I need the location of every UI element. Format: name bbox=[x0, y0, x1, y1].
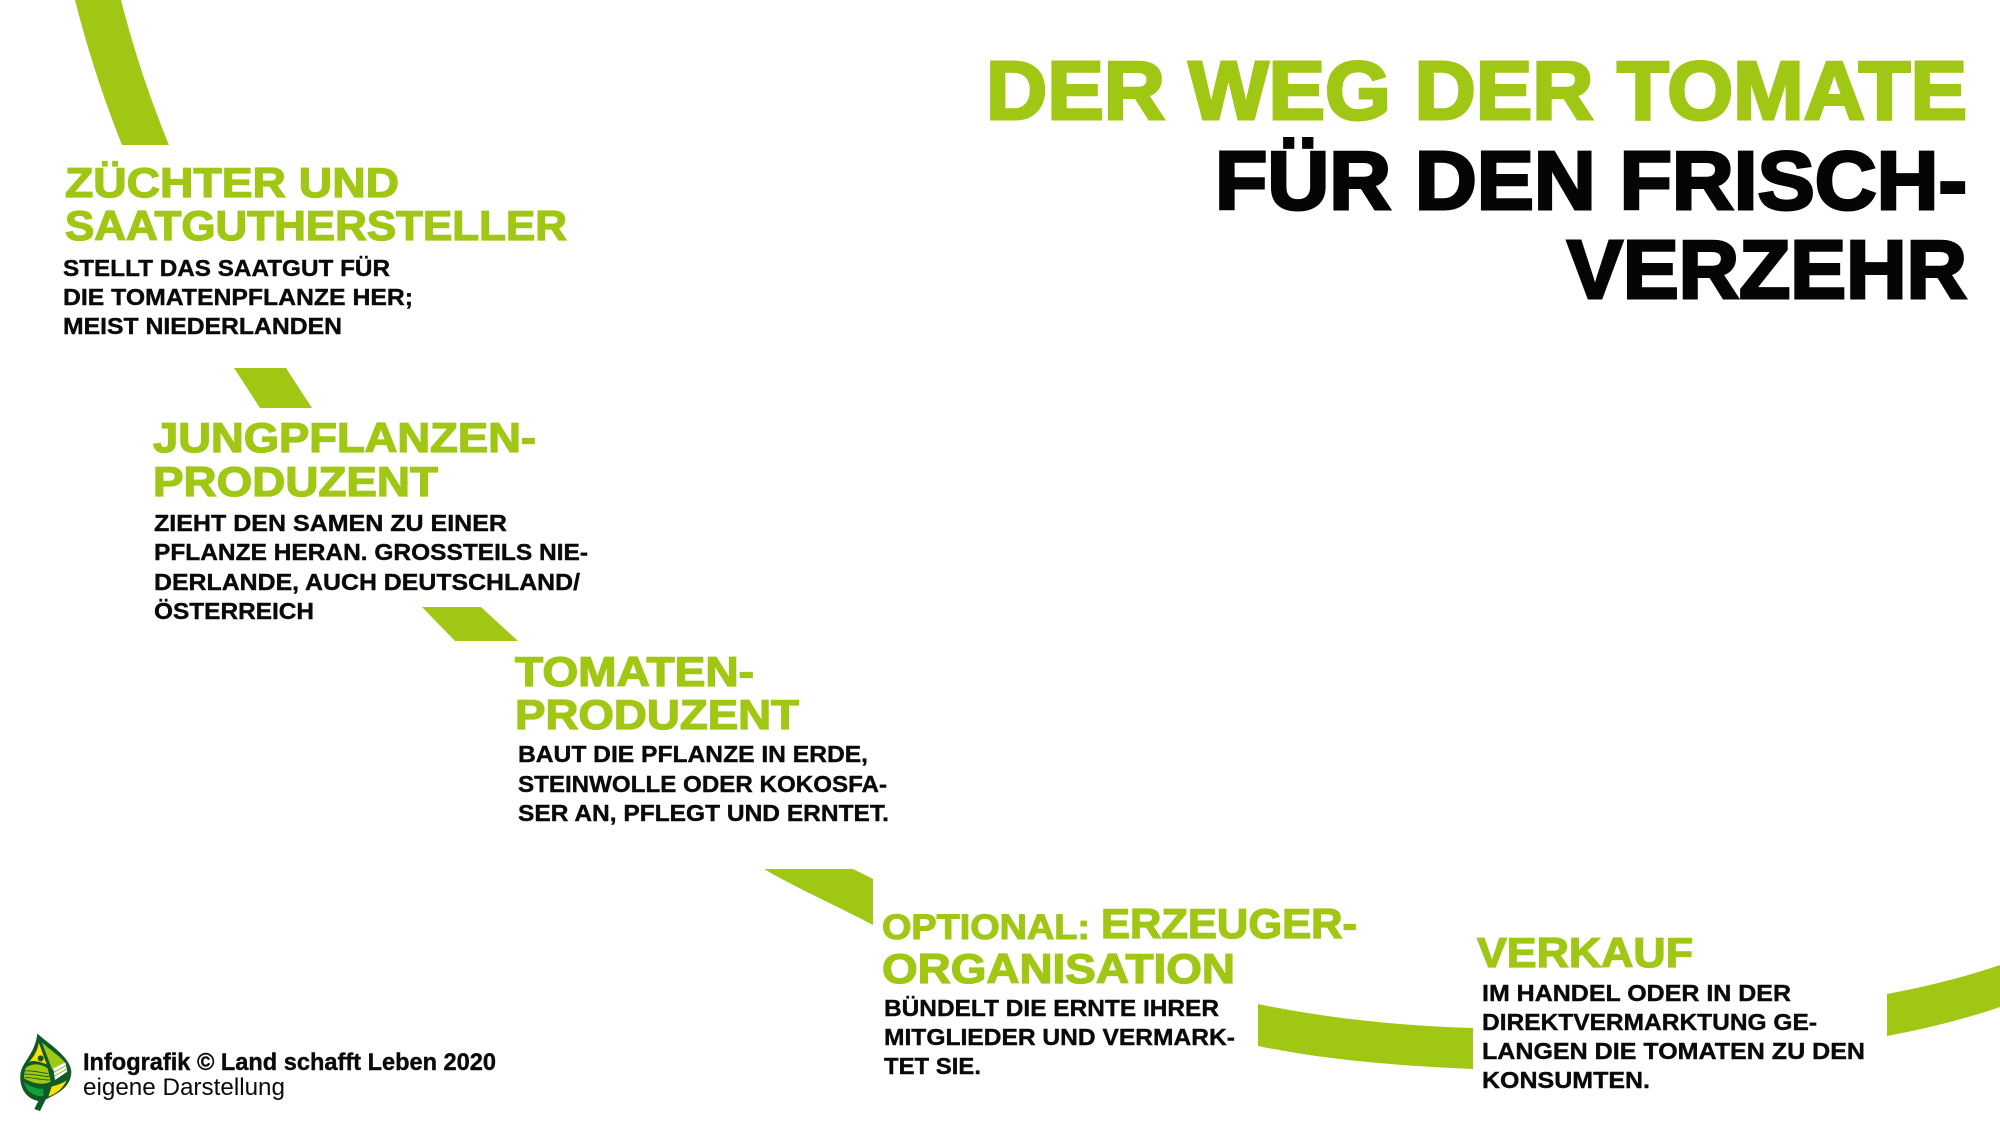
heading bbox=[153, 414, 536, 505]
description: KONSUMTEN. bbox=[1482, 1067, 1650, 1093]
description bbox=[154, 510, 588, 624]
credit bbox=[83, 1049, 496, 1101]
path segment: fifth bbox=[1258, 1004, 1473, 1069]
description: PFLANZE HERAN. GROSSTEILS NIE- bbox=[154, 539, 588, 565]
step: Erzeugerorganisation bbox=[882, 900, 1357, 1079]
description bbox=[884, 995, 1235, 1079]
step: Verkauf bbox=[1477, 929, 1865, 1093]
heading: PRODUZENT bbox=[153, 458, 438, 505]
description: ÖSTERREICH bbox=[154, 598, 314, 624]
description: MEIST NIEDERLANDEN bbox=[63, 313, 342, 339]
description: DIREKTVERMARKTUNG GE- bbox=[1482, 1009, 1817, 1035]
heading: OPTIONAL: bbox=[882, 908, 1090, 947]
path segment: second bbox=[234, 368, 312, 408]
heading: PRODUZENT bbox=[515, 691, 799, 738]
description: STEINWOLLE ODER KOKOSFA- bbox=[518, 771, 887, 797]
icon: leaf logo bbox=[20, 1033, 71, 1111]
heading bbox=[515, 648, 799, 738]
heading: ORGANISATION bbox=[882, 945, 1235, 992]
description: LANGEN DIE TOMATEN ZU DEN bbox=[1482, 1038, 1865, 1064]
step: Tomaten-Produzent bbox=[515, 648, 889, 826]
description: BAUT DIE PFLANZE IN ERDE, bbox=[518, 741, 868, 767]
path segment: sixth bbox=[1887, 965, 2000, 1036]
heading: JUNGPFLANZEN- bbox=[153, 414, 536, 461]
title: DER WEG DER TOMATE bbox=[986, 44, 1967, 137]
heading: SAATGUTHERSTELLER bbox=[65, 202, 567, 249]
description: STELLT DAS SAATGUT FÜR bbox=[63, 255, 390, 281]
description: TET SIE. bbox=[884, 1053, 981, 1079]
title: FÜR DEN FRISCH- bbox=[1215, 134, 1967, 227]
heading bbox=[882, 900, 1357, 992]
path segment: fourth bbox=[764, 869, 873, 925]
heading: VERKAUF bbox=[1477, 929, 1693, 976]
heading: TOMATEN- bbox=[515, 648, 754, 695]
step: Züchter und Saatguthersteller bbox=[63, 159, 567, 339]
description: DIE TOMATENPFLANZE HER; bbox=[63, 284, 413, 310]
heading: ERZEUGER- bbox=[1101, 900, 1357, 947]
credit: eigene Darstellung bbox=[83, 1074, 285, 1101]
description: IM HANDEL ODER IN DER bbox=[1482, 980, 1791, 1006]
description bbox=[63, 255, 413, 339]
description bbox=[518, 741, 889, 826]
heading: ZÜCHTER UND bbox=[65, 159, 399, 206]
step: Jungpflanzen-Produzent bbox=[153, 414, 588, 624]
description: MITGLIEDER UND VERMARK- bbox=[884, 1024, 1235, 1050]
path segment: top band bbox=[75, 0, 169, 145]
path segment: third bbox=[422, 607, 518, 641]
description: DERLANDE, AUCH DEUTSCHLAND/ bbox=[154, 569, 580, 595]
credit: Infografik © Land schafft Leben 2020 bbox=[83, 1049, 496, 1076]
heading bbox=[65, 159, 567, 249]
description: ZIEHT DEN SAMEN ZU EINER bbox=[154, 510, 507, 536]
title: VERZEHR bbox=[1567, 223, 1967, 316]
description bbox=[1482, 980, 1865, 1093]
description: BÜNDELT DIE ERNTE IHRER bbox=[884, 995, 1219, 1021]
description: SER AN, PFLEGT UND ERNTET. bbox=[518, 800, 889, 826]
title bbox=[986, 44, 1967, 316]
